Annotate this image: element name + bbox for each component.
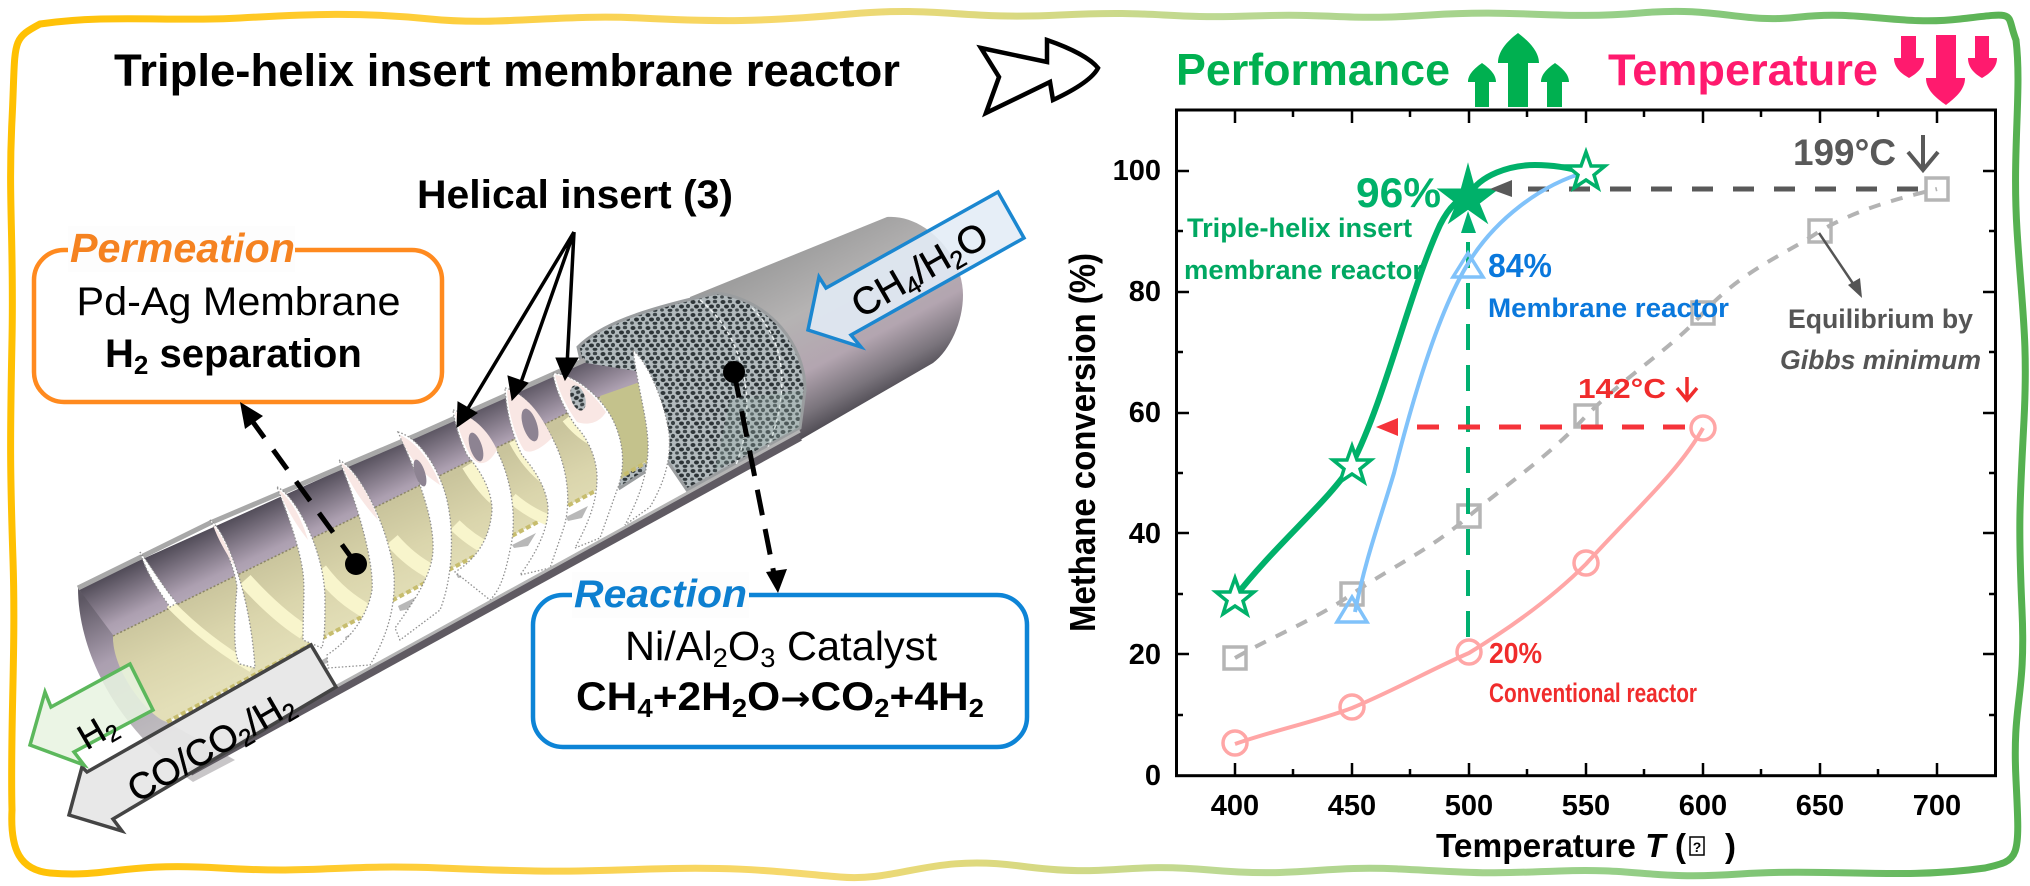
label: membrane reactor blue: Membrane reactor (1488, 293, 1730, 323)
reaction heading: Reaction (574, 573, 747, 616)
label: equilibrium by: Equilibrium by (1788, 304, 1973, 334)
arrowheads of guides (1376, 180, 1512, 436)
icon: performance up arrows (1468, 33, 1569, 107)
x axis tick labels: 700 (1913, 790, 1961, 822)
pink ribbon tips (213, 375, 606, 566)
membrane speckled edge (167, 462, 647, 722)
ribbon holes (411, 383, 589, 488)
left end of tube (78, 588, 235, 782)
label: Gibbs minimum: Gibbs minimum (1780, 345, 1981, 375)
label: membrane reactor green: membrane reactor (1184, 255, 1423, 285)
y axis tick labels: 100 (1113, 155, 1161, 187)
label: 20%: 20% (1489, 638, 1542, 670)
arrow: CH4/H2O inlet: 2 (945, 244, 971, 276)
arrow: H2 outlet: H (71, 711, 112, 757)
dashed guide: 199 C (1528, 186, 1923, 192)
y axis tick labels: 0 (1145, 760, 1161, 792)
y axis tick labels: 40 (1129, 518, 1161, 550)
reaction equation: CH (576, 675, 634, 719)
chart: methane conversion vs temperature (1062, 110, 1996, 864)
reaction equation: O (747, 675, 780, 719)
catalyst foam section (578, 293, 805, 490)
label: 142 C: 142°C (1578, 373, 1666, 404)
catalyst text: 3 (760, 643, 775, 673)
dashed guide: 500 C (1466, 242, 1470, 637)
reaction equation: 2 (732, 693, 747, 723)
membrane top edge (113, 397, 600, 636)
helical insert arrows (457, 232, 578, 427)
x axis tick labels: 450 (1328, 790, 1376, 822)
foam tint (715, 390, 803, 470)
reaction equation: +2H (653, 675, 732, 719)
arrow: CO/CO2/H2 outlet: CO/CO (120, 714, 246, 810)
H2 separation text: 2 (134, 350, 148, 380)
permeation heading: Permeation (70, 225, 295, 271)
arrow: CH4/H2O inlet: /H (904, 237, 958, 292)
x axis tick labels: 400 (1211, 790, 1259, 822)
series: equilibrium (1224, 178, 1948, 669)
reaction equation: →CO (780, 675, 870, 719)
x axis title: ) (1725, 827, 1736, 864)
arrow: H2 outlet (30, 664, 153, 765)
arrow: CO/CO2/H2 outlet: 2 (278, 698, 303, 728)
label: 96%: 96% (1356, 169, 1441, 216)
label: 84%: 84% (1488, 247, 1552, 284)
label: 199 C: 199°C (1793, 132, 1896, 173)
catalyst text: 2 (713, 643, 728, 673)
arrow: CH4/H2O inlet: 4 (900, 270, 927, 302)
transition arrow (981, 40, 1098, 113)
grey ribbon feet (322, 506, 588, 664)
arrow: CO/CO2/H2 outlet: /H (237, 689, 290, 743)
arrow: CO/CO2/H2 outlet (69, 645, 336, 831)
arrow: CO/CO2/H2 outlet: 2 (234, 723, 259, 753)
helical insert label: Helical insert (3) (417, 173, 733, 217)
reaction pointer arrow (723, 361, 787, 593)
reactor illustration (78, 217, 963, 782)
permeation pointer arrow (240, 402, 367, 575)
outer grey tube (690, 217, 963, 492)
temperature heading: Temperature (1608, 46, 1878, 95)
catalyst text: Catalyst (775, 623, 938, 669)
tube top rim (78, 360, 585, 588)
catalyst text: Ni/Al (625, 623, 712, 669)
inner wall of cut-away tube (78, 362, 650, 640)
helical insert ribbons (140, 350, 669, 668)
ribbon shadows on membrane (170, 418, 592, 668)
arrow: H2 outlet: 2 (101, 718, 125, 747)
foam highlights (700, 300, 782, 478)
Pd-Ag membrane (113, 382, 648, 722)
y axis tick labels: 80 (1129, 276, 1161, 308)
reaction equation: +4H (890, 675, 969, 719)
performance heading: Performance (1176, 45, 1450, 95)
panel: reaction (533, 572, 1027, 747)
y axis tick labels: 60 (1129, 397, 1161, 429)
reaction equation: 2 (874, 693, 890, 723)
y axis tick labels (1113, 155, 1161, 792)
tube lower rim (190, 437, 800, 772)
membrane text: Pd-Ag Membrane (76, 280, 400, 324)
series: membrane reactor (1337, 172, 1586, 622)
arrow: CH4/H2O inlet: O (949, 215, 996, 266)
tube lower rim highlight (337, 431, 800, 686)
plot frame (1176, 110, 1996, 776)
arrow: CH4/H2O inlet: CH (844, 263, 913, 326)
label: conventional reactor: Conventional reactor (1489, 678, 1697, 708)
label: triple-helix insert: Triple-helix insert (1187, 213, 1412, 243)
x axis tick labels: 550 (1562, 790, 1610, 822)
panel: permeation (34, 225, 442, 402)
axis ticks (1176, 110, 1996, 776)
series: conventional reactor (1223, 416, 1715, 755)
icon: temperature down arrows (1894, 35, 1997, 105)
arrow: CH4/H2O inlet (808, 192, 1024, 347)
H2 separation text: separation (148, 332, 362, 376)
x axis tick labels: 650 (1796, 790, 1844, 822)
membrane end under foam (600, 382, 648, 478)
icon: grey down arrow (1908, 135, 1938, 170)
icon: red down arrow (1677, 377, 1697, 400)
catalyst text: O (728, 623, 760, 669)
y axis title: Methane conversion (%) (1062, 253, 1103, 632)
x axis tick labels (1211, 790, 1961, 822)
x axis tick labels: 600 (1679, 790, 1727, 822)
equilibrium pointer arrow (1819, 233, 1862, 298)
y axis tick labels: 20 (1129, 639, 1161, 671)
H2 separation text: H (105, 332, 134, 376)
x axis tick labels: 500 (1445, 790, 1493, 822)
reaction equation: 4 (637, 693, 653, 723)
x axis title: ? (1693, 839, 1701, 855)
dashed guide: 142 C (1417, 424, 1703, 430)
reaction equation: 2 (969, 693, 984, 723)
title: Triple-helix insert membrane reactor (114, 45, 900, 96)
series: triple-helix membrane reactor (1216, 152, 1605, 614)
x axis title: Temperature T ( (1436, 827, 1686, 864)
